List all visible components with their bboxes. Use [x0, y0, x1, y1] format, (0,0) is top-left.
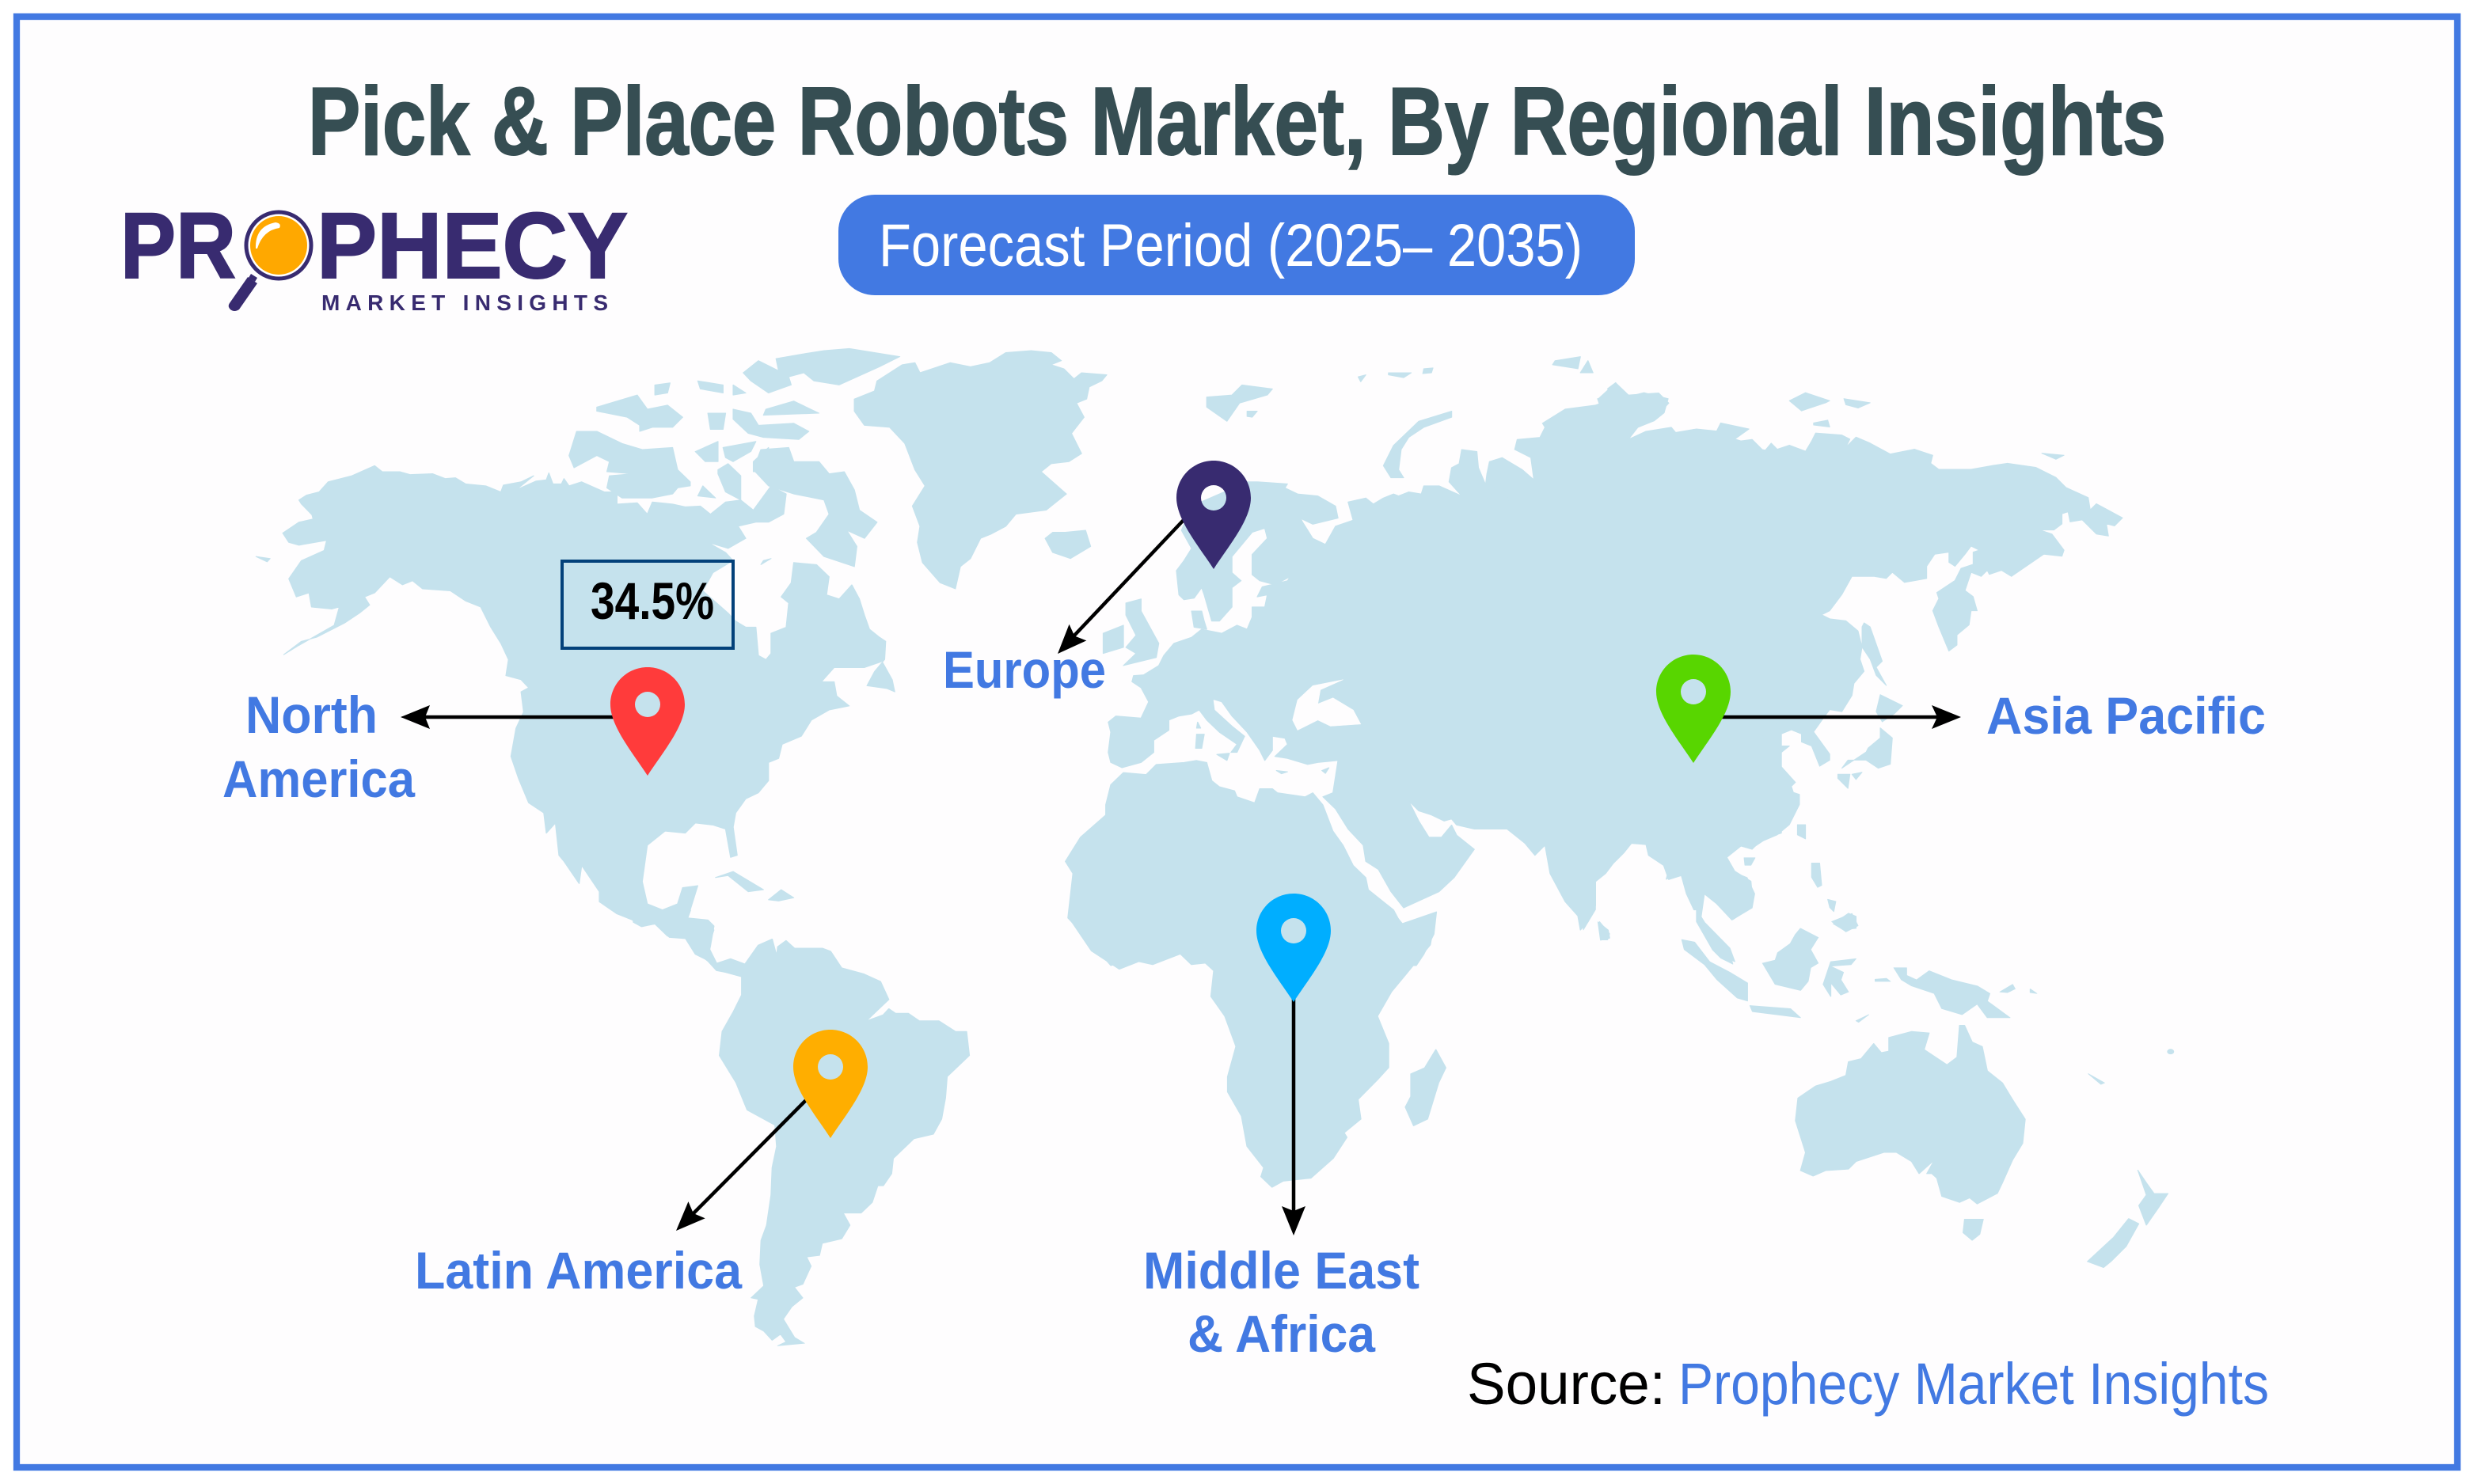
logo: Prophecy Market Insights [120, 194, 628, 315]
arrow: Europe [1049, 520, 1184, 662]
label: Middle East and Africa: & Africa [1188, 1304, 1376, 1363]
East Asian islands [1599, 393, 2064, 939]
European and Arctic islands [1045, 357, 1609, 940]
label: Middle East and Africa: Middle East [1143, 1241, 1419, 1300]
arrow: Latin America [667, 1098, 808, 1239]
pin: Middle East and Africa [1256, 894, 1331, 1002]
pin: Latin America [793, 1030, 868, 1138]
pin: North America [610, 667, 685, 776]
Eurasia west [1108, 383, 1781, 930]
logo: Prophecy Market Insights: PHECY [317, 194, 628, 298]
label: Asia Pacific: Asia Pacific [1986, 686, 2266, 745]
arrow: North America [401, 705, 614, 729]
label: North America: North [245, 685, 378, 744]
forecast period pill: Forecast Period (2025– 2035) [879, 212, 1583, 279]
source line [1467, 1351, 2269, 1417]
arrow: Middle East and Africa [1282, 999, 1305, 1235]
New Zealand [2088, 1170, 2168, 1268]
arrow: Asia Pacific [1720, 705, 1961, 729]
logo: Prophecy Market Insights: MARKET INSIGHTS [321, 290, 608, 315]
value box: 34.5%: 34.5% [591, 571, 714, 630]
label: Europe: Europe [943, 640, 1106, 699]
label: Middle East and Africa [1143, 1241, 1419, 1363]
label: North America [222, 685, 416, 808]
Africa south [1070, 910, 1436, 1187]
Tasmania [1963, 1219, 1983, 1240]
Eurasia east [1583, 382, 2122, 964]
South America [720, 939, 969, 1345]
Black Sea [1293, 680, 1361, 731]
Madagascar [1405, 1049, 1446, 1125]
label: North America: America [222, 750, 416, 808]
logo: Prophecy Market Insights: PR [120, 194, 236, 298]
source line: Source: [1467, 1351, 1666, 1417]
Central America [633, 910, 747, 977]
Greenland [854, 351, 1107, 589]
value box: 34.5% [562, 561, 733, 648]
world map [256, 348, 2174, 1345]
source line: Prophecy Market Insights [1678, 1351, 2269, 1417]
forecast period pill [838, 195, 1635, 295]
Africa north [1066, 761, 1436, 966]
pin: Asia Pacific [1656, 655, 1731, 763]
Southeast Asia and Oceania islands [1682, 910, 2174, 1084]
Australia [1796, 1025, 2025, 1204]
Arctic islands and Caribbean [256, 348, 900, 901]
North America landmass [283, 465, 895, 966]
pin: Europe [1176, 461, 1251, 569]
label: Latin America: Latin America [415, 1241, 743, 1300]
